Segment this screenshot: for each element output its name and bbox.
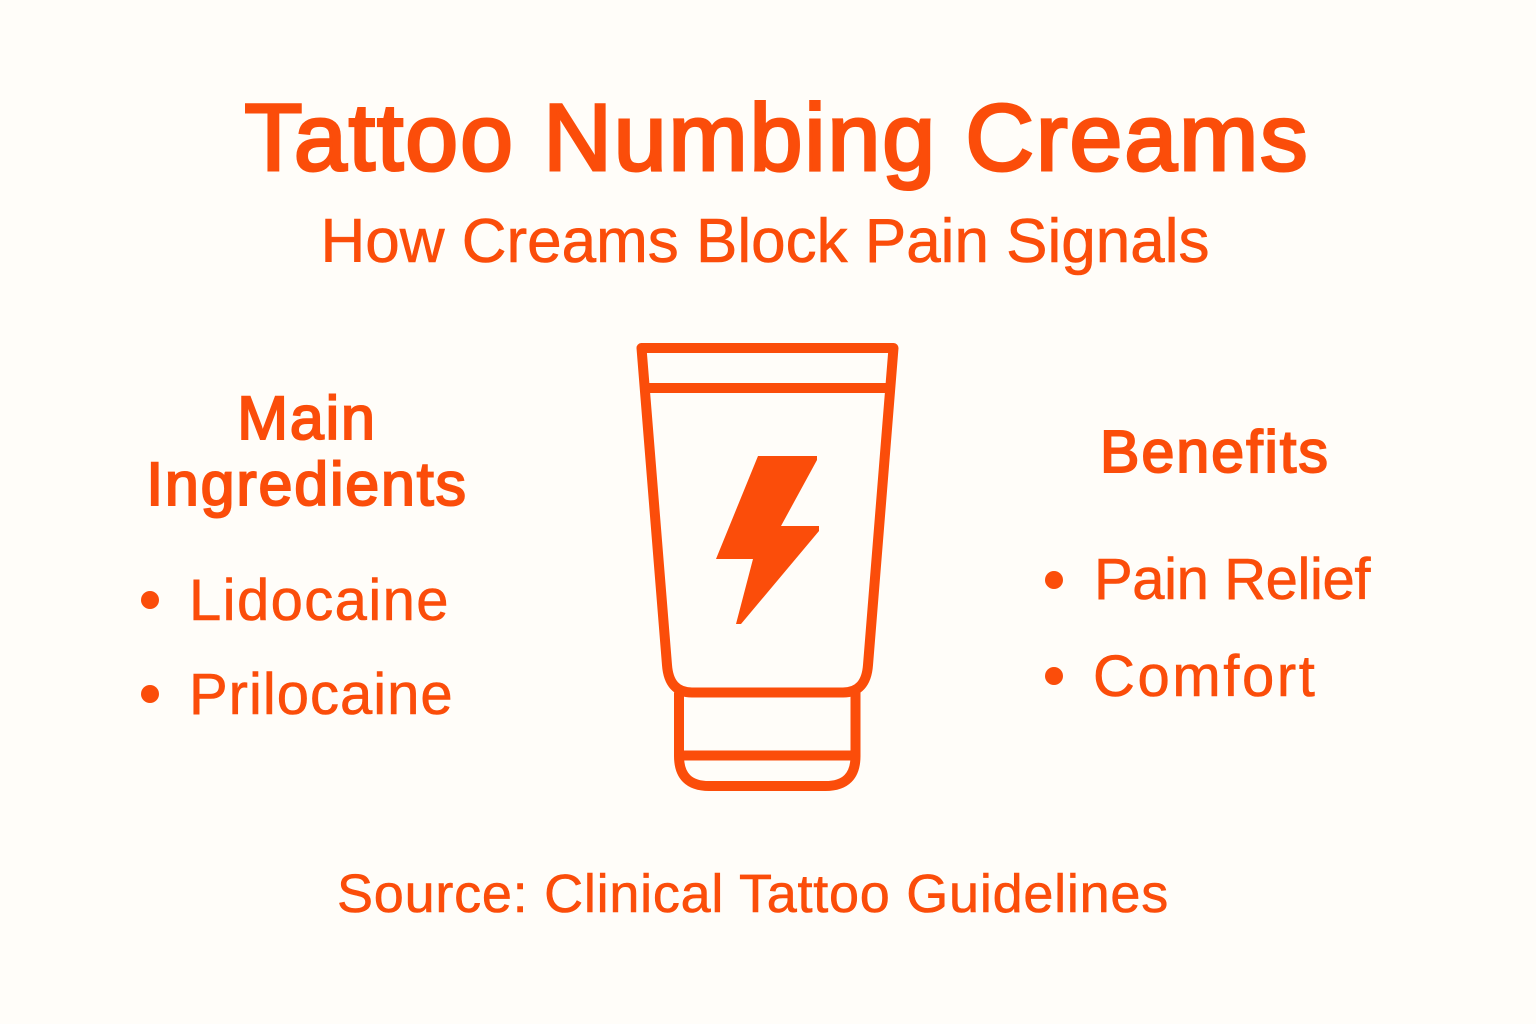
heading: benefits: Benefits bbox=[1100, 419, 1330, 485]
list item: lidocaine: Lidocaine bbox=[189, 568, 450, 633]
source line: Source: Clinical Tattoo Guidelines bbox=[337, 864, 1169, 924]
heading: main ingredients: Ingredients bbox=[146, 450, 468, 518]
panel: main ingredients bbox=[141, 384, 468, 727]
list item: comfort: Comfort bbox=[1093, 644, 1317, 709]
icon: lightning bolt bbox=[716, 456, 819, 624]
panel: benefits bbox=[1045, 419, 1371, 709]
subtitle: How Creams Block Pain Signals bbox=[320, 207, 1210, 276]
icon: cream tube with lightning bolt bbox=[636, 343, 898, 791]
title: Tattoo Numbing Creams bbox=[244, 85, 1310, 191]
list item: prilocaine: Prilocaine bbox=[189, 662, 454, 727]
list item: pain relief: Pain Relief bbox=[1094, 547, 1370, 612]
heading: main ingredients bbox=[146, 384, 468, 518]
heading: main ingredients: Main bbox=[237, 384, 377, 452]
